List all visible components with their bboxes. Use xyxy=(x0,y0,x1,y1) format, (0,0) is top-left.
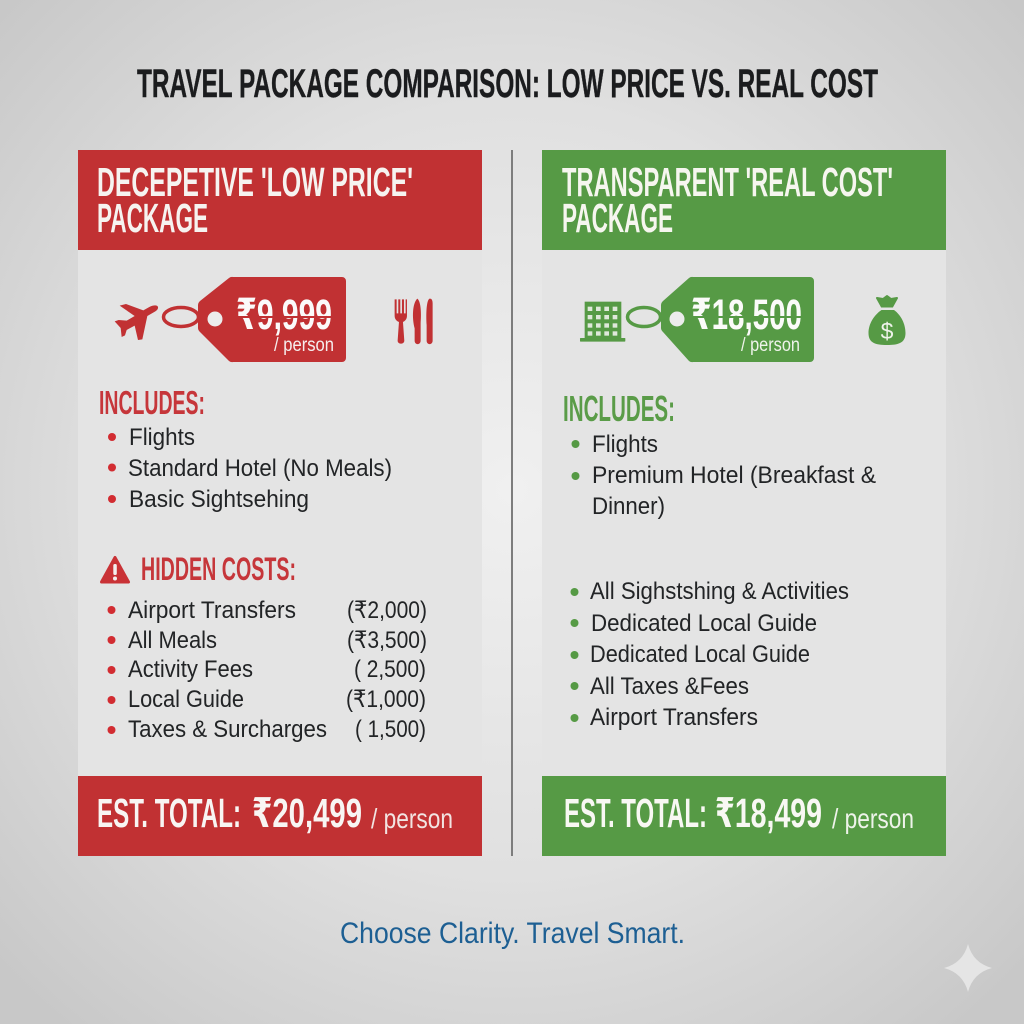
hidden costs list: Activity Fees xyxy=(128,656,253,683)
includes list: deceptive: INCLUDES: xyxy=(99,384,205,421)
includes list: transparent: Dedicated Local Guide xyxy=(591,610,817,637)
hidden costs list: Airport Transfers xyxy=(128,597,296,624)
icon: sparkle xyxy=(944,944,992,992)
includes list: transparent: All Taxes &Fees xyxy=(590,673,749,700)
icon: money bag xyxy=(868,296,906,345)
panel: transparent real cost package xyxy=(542,150,946,856)
includes list: transparent: Flights xyxy=(592,431,658,458)
icon: hotel building xyxy=(580,302,625,342)
hidden costs list xyxy=(108,551,427,743)
header: transparent package xyxy=(542,150,946,250)
price tag: 18,500 xyxy=(628,277,814,362)
includes list: deceptive: Flights xyxy=(129,424,195,451)
header: deceptive package xyxy=(78,150,482,250)
icon: money bag: $ xyxy=(881,318,894,344)
hidden costs list: (₹2,000) xyxy=(347,597,427,624)
includes list: transparent: Premium Hotel (Breakfast & xyxy=(592,462,876,489)
icon: airplane xyxy=(115,304,158,340)
includes list: deceptive xyxy=(99,384,392,513)
includes list: transparent: Dinner) xyxy=(592,493,665,520)
hidden costs list: ( 1,500) xyxy=(355,716,426,743)
includes list: deceptive: Standard Hotel (No Meals) xyxy=(128,455,392,482)
price tag: 18,500: ₹18,500 xyxy=(691,291,802,339)
panel: deceptive low price package xyxy=(78,150,482,856)
header: transparent package: PACKAGE xyxy=(562,195,673,241)
footer: deceptive estimated total: EST. TOTAL: xyxy=(97,790,241,836)
includes list: transparent: Airport Transfers xyxy=(590,704,758,731)
includes list: transparent: All Sighstshing & Activities xyxy=(590,578,849,605)
hidden costs list: Local Guide xyxy=(128,686,244,713)
includes list: transparent: Dedicated Local Guide xyxy=(590,641,810,668)
footer: deceptive estimated total: ₹20,499 xyxy=(252,790,362,836)
price tag: 9,999 xyxy=(164,277,346,362)
icon: warning triangle xyxy=(102,558,128,582)
hidden costs list: (₹3,500) xyxy=(347,627,427,654)
price tag: 18,500: / person xyxy=(741,335,800,356)
includes list: deceptive: Basic Sightsehing xyxy=(129,486,309,513)
header: deceptive package: PACKAGE xyxy=(97,195,208,241)
hidden costs list: HIDDEN COSTS: xyxy=(141,551,296,587)
footer: transparent estimated total xyxy=(542,776,946,856)
hidden costs list: All Meals xyxy=(128,627,217,654)
hidden costs list: Taxes & Surcharges xyxy=(128,716,327,743)
footer: transparent estimated total: EST. TOTAL: xyxy=(564,790,707,836)
header: deceptive package: DECEPETIVE 'LOW PRICE' xyxy=(97,159,413,205)
hidden costs list: ( 2,500) xyxy=(354,656,426,683)
hidden costs list: (₹1,000) xyxy=(346,686,426,713)
footer: deceptive estimated total: / person xyxy=(371,803,453,834)
footer: transparent estimated total: ₹18,499 xyxy=(715,790,822,836)
footer: transparent estimated total: / person xyxy=(832,803,914,834)
includes list: transparent: INCLUDES: xyxy=(563,388,675,429)
price tag: 9,999: / person xyxy=(274,335,334,356)
tagline: Choose Clarity. Travel Smart. xyxy=(340,917,685,950)
footer: deceptive estimated total xyxy=(78,776,482,856)
includes list: transparent xyxy=(563,388,876,731)
price tag: 9,999: ₹9,999 xyxy=(236,291,332,339)
icon: fork and knife xyxy=(395,299,433,344)
